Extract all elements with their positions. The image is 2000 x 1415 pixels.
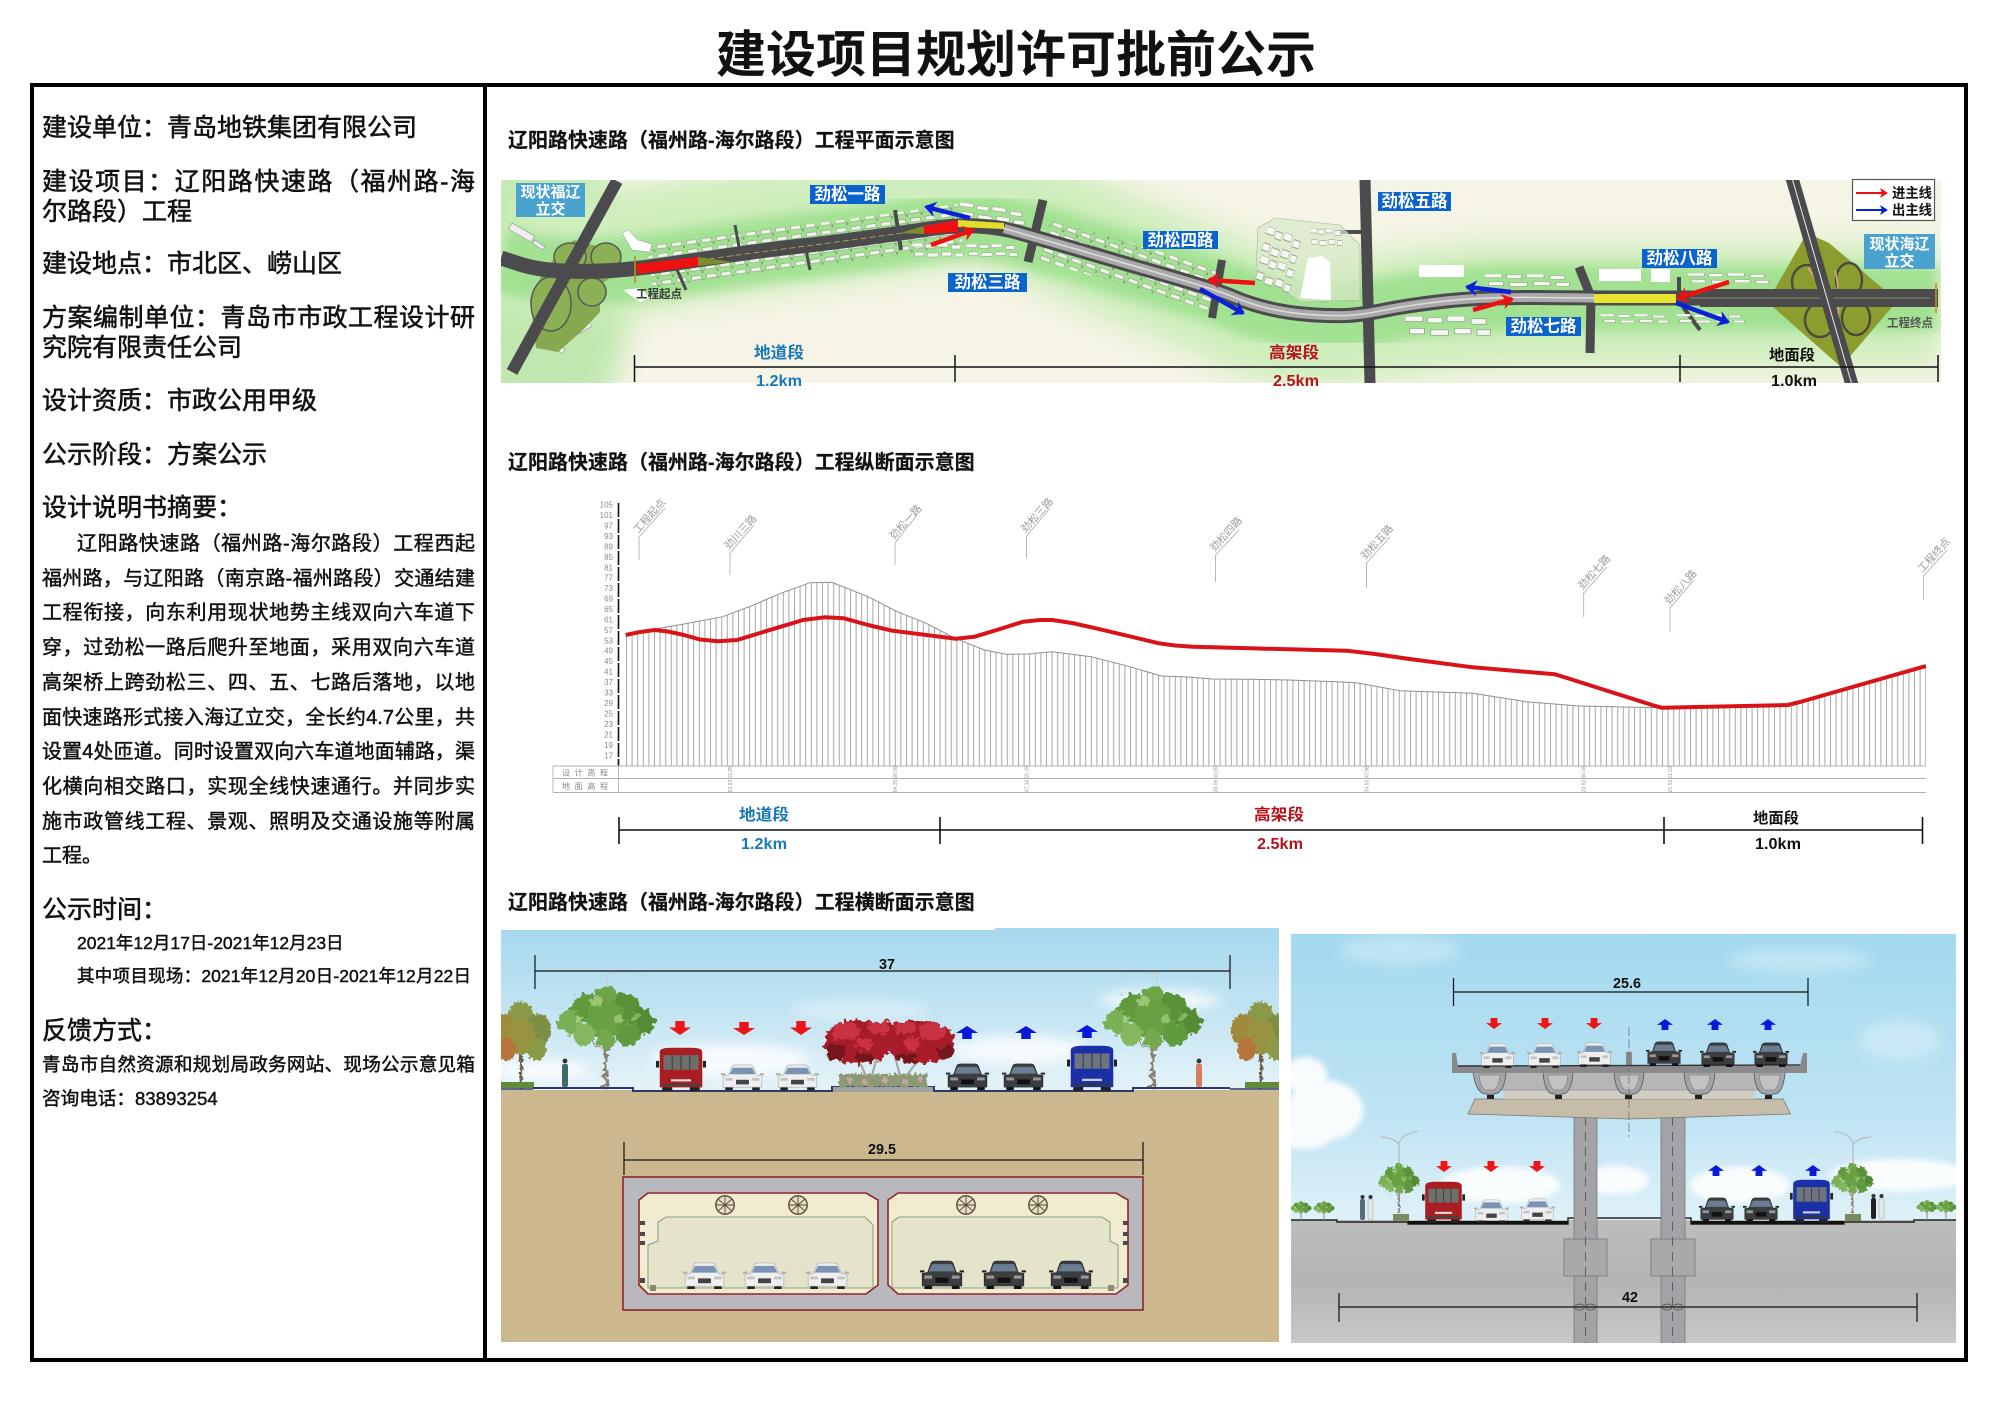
text: notice dates: 2021年12月17日-2021年12月23日 bbox=[77, 933, 344, 953]
station names: 劲松三路 bbox=[1018, 495, 1056, 535]
ground bbox=[501, 1090, 1279, 1342]
heading: longitudinal section: 辽阳路快速路（福州路-海尔路段）工程纵断面示意图 bbox=[508, 452, 975, 474]
axis labels: 77 bbox=[604, 574, 614, 583]
axis labels: 101 bbox=[600, 511, 614, 520]
station names: 工程终点 bbox=[1915, 535, 1953, 575]
elevation table: 50.05 bbox=[1214, 766, 1220, 779]
plan distance values bbox=[756, 373, 1817, 390]
axis labels: 89 bbox=[604, 542, 614, 551]
road name labels: 劲松四路 bbox=[1148, 231, 1214, 250]
direction arrows bbox=[669, 1021, 1098, 1039]
bridge columns bbox=[1564, 1117, 1695, 1343]
elevation table: 53.85 bbox=[728, 766, 734, 779]
axis labels bbox=[600, 501, 614, 761]
sky bbox=[501, 928, 1279, 1092]
elevation table: 38.06 bbox=[1214, 780, 1220, 792]
road surface bbox=[533, 1087, 1230, 1091]
axis labels: 45 bbox=[604, 657, 614, 666]
longitudinal profile chart bbox=[553, 495, 1953, 792]
interchange labels bbox=[516, 183, 1935, 270]
text: project: 尔路段）工程 bbox=[42, 198, 192, 226]
station callouts bbox=[639, 508, 1947, 632]
road name labels bbox=[810, 185, 1717, 336]
station names: 劲川三路 bbox=[722, 512, 760, 552]
street trees bbox=[1379, 1164, 1873, 1221]
text: builder: 建设单位：青岛地铁集团有限公司 bbox=[42, 114, 417, 142]
surface vehicles bbox=[656, 1046, 1117, 1091]
dimension 42: 42 bbox=[1622, 1289, 1638, 1306]
axis labels: 41 bbox=[604, 668, 614, 677]
interchange: Hailiao bbox=[1773, 233, 1892, 367]
ground line bbox=[626, 582, 1657, 708]
heading: plan view: 辽阳路快速路（福州路-海尔路段）工程平面示意图 bbox=[508, 130, 955, 152]
shrubs bbox=[1290, 1200, 1957, 1221]
axis labels: 23 bbox=[604, 720, 614, 729]
text: design institute bbox=[42, 304, 475, 362]
axis labels: 49 bbox=[604, 647, 614, 656]
hedges bbox=[501, 1082, 1279, 1088]
deck arrows bbox=[1486, 1018, 1776, 1030]
road name labels: 劲松三路 bbox=[954, 273, 1020, 292]
design elevation line bbox=[626, 617, 1926, 708]
text: project bbox=[42, 168, 475, 226]
main road bbox=[501, 226, 1938, 316]
text: feedback heading: 反馈方式： bbox=[42, 1017, 167, 1045]
axis labels: 73 bbox=[604, 584, 614, 593]
plan distance values: 1.2km bbox=[756, 373, 802, 390]
station names bbox=[631, 495, 1953, 607]
profile scale: ground section: 1.0km bbox=[1755, 836, 1801, 853]
axis labels: 85 bbox=[604, 553, 614, 562]
axis labels: 17 bbox=[604, 752, 614, 761]
plan legend: 出主线 bbox=[1892, 202, 1932, 218]
elevation table: 63.93 bbox=[728, 780, 734, 792]
street trees bbox=[491, 986, 1291, 1088]
profile scale: ground section bbox=[1664, 809, 1922, 853]
profile scale: ground section: 地面段 bbox=[1753, 809, 1799, 827]
pedestrians bbox=[562, 1059, 1202, 1087]
dimension 25.6 bbox=[1454, 975, 1808, 1006]
elevation table: 地 面 高 程 bbox=[562, 781, 608, 791]
dimension 29.5: 29.5 bbox=[868, 1141, 896, 1158]
profile scale: subway section: 地道段 bbox=[739, 805, 789, 824]
bridge centre line bbox=[1628, 1027, 1630, 1137]
heading: cross section: 辽阳路快速路（福州路-海尔路段）工程横断面示意图 bbox=[508, 892, 975, 914]
jet fans bbox=[716, 1196, 1047, 1214]
text: qualification: 设计资质：市政公用甲级 bbox=[42, 387, 317, 415]
start and end labels bbox=[636, 286, 1933, 330]
elevation axis bbox=[618, 503, 620, 766]
plan legend: 进主线 bbox=[1892, 185, 1932, 201]
elevation table: 36.08 bbox=[1582, 766, 1588, 779]
ramp arrows bbox=[926, 207, 1729, 322]
elevation table: 设 计 高 程 bbox=[562, 768, 608, 778]
section start and end markers bbox=[635, 256, 1936, 313]
profile scale: elevated section: 2.5km bbox=[1257, 836, 1303, 853]
dimension 25.6: 25.6 bbox=[1613, 975, 1641, 992]
text: summary body: 辽阳路快速路（福州路-海尔路段）工程西起 bbox=[77, 533, 475, 555]
start and end labels: 工程起点 bbox=[636, 286, 682, 301]
street lamps bbox=[1381, 1131, 1871, 1165]
axis labels: 25 bbox=[604, 709, 614, 718]
text: summary body: 穿，过劲松一路后爬升至地面，采用双向六车道 bbox=[42, 637, 475, 659]
text: summary body: 设置4处匝道。同时设置双向六车道地面辅路，渠 bbox=[42, 741, 475, 763]
panel: project information bbox=[42, 114, 475, 1109]
plan scale: ground section bbox=[1680, 346, 1938, 382]
station names: 劲松五路 bbox=[1358, 522, 1396, 562]
axis labels: 37 bbox=[604, 678, 614, 687]
axis labels: 33 bbox=[604, 688, 614, 697]
elevation table: 23.92 bbox=[1582, 780, 1588, 792]
tunnel equipment bbox=[640, 1221, 1128, 1291]
profile scale: subway section bbox=[619, 805, 940, 853]
axis labels: 81 bbox=[604, 563, 614, 572]
text: notice period heading: 公示时间： bbox=[42, 896, 167, 924]
text: summary body: 化横向相交路口，实现全线快速通行。并同步实 bbox=[42, 776, 475, 798]
ground elevation bars bbox=[626, 582, 1926, 766]
hailiao main line overpass bbox=[1792, 178, 1852, 385]
buildings along the road bbox=[508, 202, 1769, 354]
text: summary body: 工程衔接，向东利用现状地势主线双向六车道下 bbox=[42, 602, 475, 624]
deck vehicles bbox=[1480, 1042, 1789, 1068]
elevation table: 43.96 bbox=[1364, 766, 1370, 779]
profile scale: elevated section: 高架段 bbox=[1254, 805, 1304, 824]
plan scale: subway section bbox=[634, 343, 955, 382]
interchange labels: 立交 bbox=[535, 200, 566, 218]
plan distance values: 2.5km bbox=[1273, 373, 1319, 390]
cross roads bbox=[675, 180, 1700, 383]
plan scale: elevated section bbox=[955, 343, 1680, 382]
dense neighbourhood texture bbox=[650, 225, 1215, 290]
sky bbox=[1291, 934, 1956, 1222]
plan legend bbox=[1852, 180, 1934, 220]
axis labels: 61 bbox=[604, 615, 614, 624]
text: summary body: 施市政管线工程、景观、照明及交通设施等附属 bbox=[42, 811, 475, 833]
ground vehicles bbox=[1422, 1180, 1833, 1223]
axis labels: 21 bbox=[604, 731, 614, 740]
text: notice dates bbox=[77, 933, 471, 986]
text: summary heading: 设计说明书摘要： bbox=[42, 494, 242, 522]
interchange labels: 现状海辽 bbox=[1870, 235, 1930, 253]
dimension 37 bbox=[535, 955, 1230, 989]
cap beam bbox=[1468, 1099, 1790, 1119]
axis labels: 19 bbox=[604, 741, 614, 750]
plan distance values: 1.0km bbox=[1771, 373, 1817, 390]
text: feedback body: 青岛市自然资源和规划局政务网站、现场公示意见箱 bbox=[42, 1054, 475, 1075]
tunnel vehicles bbox=[683, 1261, 1093, 1289]
text: summary body: 高架桥上跨劲松三、四、五、七路后落地，以地 bbox=[42, 672, 475, 694]
text: design institute: 方案编制单位：青岛市市政工程设计研 bbox=[42, 304, 475, 332]
interchange labels: 立交 bbox=[1884, 252, 1915, 270]
text: project: 建设项目：辽阳路快速路（福州路-海 bbox=[42, 168, 475, 196]
plan scale: elevated section: 高架段 bbox=[1269, 343, 1319, 362]
elevation table: 21.53 bbox=[1668, 766, 1674, 779]
box girder deck bbox=[1452, 1052, 1807, 1099]
road name labels: 劲松八路 bbox=[1646, 249, 1712, 268]
text: design institute: 究院有限责任公司 bbox=[42, 334, 242, 362]
axis labels: 93 bbox=[604, 532, 614, 541]
interchange: Fuliao bbox=[512, 181, 621, 372]
axis labels: 65 bbox=[604, 605, 614, 614]
text: summary body: 工程。 bbox=[42, 845, 102, 867]
text: summary body bbox=[42, 532, 475, 867]
elevation table: 56.08 bbox=[893, 766, 899, 779]
plan map bbox=[501, 180, 1941, 383]
text: location: 建设地点：市北区、崂山区 bbox=[42, 250, 342, 278]
text: summary body: 面快速路形式接入海辽立交，全长约4.7公里，共 bbox=[42, 707, 475, 729]
profile scale: subway section: 1.2km bbox=[741, 836, 787, 853]
road name labels: 劲松七路 bbox=[1510, 317, 1576, 336]
ground arrows bbox=[1436, 1161, 1821, 1176]
elevation table: 47.16 bbox=[1025, 780, 1031, 792]
station names: 劲松四路 bbox=[1207, 514, 1245, 554]
median planting bbox=[824, 1020, 954, 1092]
plan scale: subway section: 地道段 bbox=[754, 343, 804, 362]
text: feedback body bbox=[42, 1054, 475, 1109]
elevation table: 64.35 bbox=[893, 780, 899, 792]
ground bbox=[1291, 1220, 1956, 1343]
elevation table bbox=[553, 766, 1926, 792]
cross section: elevated road bbox=[1277, 934, 1970, 1343]
dimension 42 bbox=[1339, 1289, 1917, 1322]
dimension 37: 37 bbox=[879, 956, 895, 973]
text: feedback body: 咨询电话：83893254 bbox=[42, 1088, 218, 1109]
axis labels: 105 bbox=[600, 501, 614, 510]
text: stage: 公示阶段：方案公示 bbox=[42, 441, 267, 469]
station names: 劲松八路 bbox=[1662, 567, 1700, 607]
dimension 29.5 bbox=[624, 1141, 1143, 1175]
station names: 劲松一路 bbox=[887, 502, 925, 542]
plan scale: ground section: 地面段 bbox=[1769, 346, 1815, 364]
panel divider bbox=[483, 83, 487, 1362]
station names: 工程起点 bbox=[631, 497, 668, 536]
profile scale: elevated section bbox=[940, 805, 1664, 853]
elevation table: 59.29 bbox=[1025, 766, 1031, 779]
cross section: surface road and underpass bbox=[490, 928, 1291, 1342]
start and end labels: 工程终点 bbox=[1887, 315, 1933, 330]
axis labels: 69 bbox=[604, 595, 614, 604]
text: summary body: 福州路，与辽阳路（南京路-福州路段）交通结建 bbox=[42, 568, 475, 590]
axis labels: 57 bbox=[604, 626, 614, 635]
road name labels: 劲松一路 bbox=[814, 185, 880, 204]
title: 建设项目规划许可批前公示 bbox=[716, 27, 1316, 83]
axis labels: 29 bbox=[604, 699, 614, 708]
axis labels: 97 bbox=[604, 522, 614, 531]
road name labels: 劲松五路 bbox=[1382, 192, 1448, 211]
axis labels: 53 bbox=[604, 636, 614, 645]
ramp colour blocks bbox=[636, 220, 1676, 303]
elevation table: 21.53 bbox=[1668, 780, 1674, 792]
pedestrians bbox=[1360, 1194, 1884, 1220]
text: notice dates: 其中项目现场：2021年12月20日-2021年12月22日 bbox=[77, 966, 471, 986]
underpass box bbox=[623, 1177, 1143, 1310]
elevation table: 34.53 bbox=[1364, 780, 1370, 792]
interchange labels: 现状福辽 bbox=[520, 183, 580, 201]
station names: 劲松七路 bbox=[1575, 552, 1613, 592]
street lamps bbox=[607, 971, 1157, 987]
